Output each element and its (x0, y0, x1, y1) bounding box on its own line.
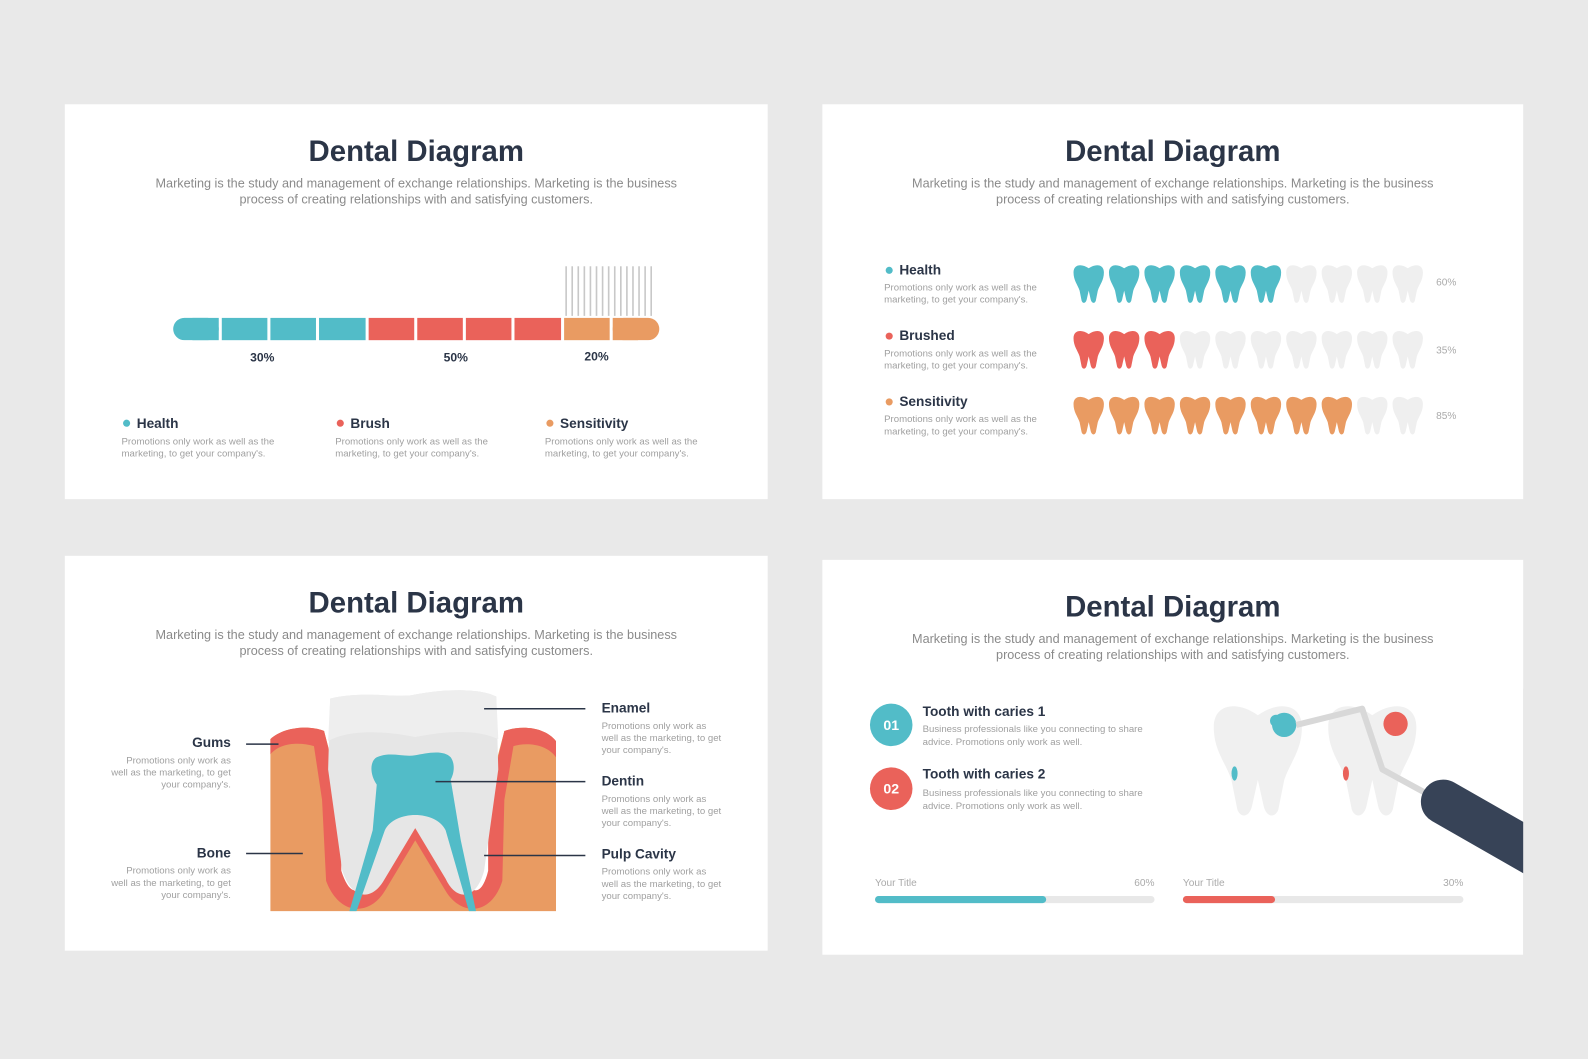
row: sensitivity (884, 394, 1456, 437)
row: sensitivity: Sensitivity (899, 394, 968, 409)
legend: brush: Promotions only work as well as the (335, 436, 488, 447)
label: gums (110, 735, 231, 791)
row: brushed: Promotions only work as well as the (884, 348, 1037, 359)
item 01 (870, 704, 1143, 748)
subtitle: process of creating relationships with and satisfying customers. (996, 192, 1350, 206)
legend: health (122, 416, 274, 460)
item 01: advice. Promotions only work as well. (923, 737, 1082, 748)
label: bone: Bone (197, 846, 231, 861)
subtitle: Marketing is the study and management of exchange relationships. Marketing is the business (912, 632, 1433, 646)
row: health (884, 262, 1456, 306)
row: brushed: marketing, to get your company's. (884, 361, 1028, 372)
subtitle (912, 632, 1434, 662)
label: gums: well as the marketing, to get (110, 768, 231, 779)
progress bar 2 (1183, 878, 1463, 903)
panel: tooth rating panel (822, 104, 1523, 499)
progress bar 2: Your Title (1183, 878, 1225, 889)
row: brushed (884, 328, 1456, 372)
row: health: marketing, to get your company's. (884, 295, 1028, 306)
icon: dental probe (1296, 709, 1550, 863)
bar labels: 30% (250, 350, 275, 364)
row: sensitivity: Promotions only work as well as the (884, 414, 1037, 425)
legend: brush: marketing, to get your company's. (335, 449, 479, 460)
row: health: Promotions only work as well as the (884, 283, 1037, 294)
label: enamel (601, 701, 722, 756)
subtitle (156, 176, 677, 206)
subtitle (912, 176, 1434, 206)
legend: brush: Brush (350, 416, 390, 431)
item 02 (870, 767, 1143, 812)
item 02: advice. Promotions only work as well. (923, 801, 1082, 812)
label: enamel: your company's. (602, 745, 671, 756)
progress bar 1 (875, 878, 1155, 903)
item 01: Tooth with caries 1 (923, 704, 1046, 719)
illustration: teeth with caries (1214, 706, 1416, 816)
row: brushed: 35% (1436, 345, 1456, 356)
panel: caries (822, 560, 1584, 962)
legend: health: Promotions only work as well as the (122, 436, 274, 447)
subtitle: Marketing is the study and management of exchange relationships. Marketing is the business (912, 176, 1433, 190)
label: bone: well as the marketing, to get (110, 878, 231, 889)
legend: sensitivity: Sensitivity (560, 416, 629, 431)
label: bone: your company's. (161, 890, 231, 901)
legend: sensitivity (545, 416, 698, 460)
item 02: 02 (883, 782, 899, 798)
label lines (246, 709, 585, 856)
legend: sensitivity: marketing, to get your company's. (545, 449, 689, 460)
title: Dental Diagram (309, 135, 524, 168)
subtitle: process of creating relationships with and satisfying customers. (240, 644, 593, 658)
subtitle: Marketing is the study and management of exchange relationships. Marketing is the business (156, 176, 677, 190)
progress bar 1: Your Title (875, 878, 917, 889)
row: sensitivity: marketing, to get your company's. (884, 426, 1028, 437)
label: gums: Gums (192, 735, 231, 750)
item 01: Business professionals like you connecting to share (923, 724, 1143, 735)
bar labels: 50% (444, 350, 468, 364)
row: health: 60% (1436, 278, 1456, 289)
label: pulp cavity: your company's. (602, 891, 671, 902)
label: gums: your company's. (161, 780, 231, 791)
title: Dental Diagram (1065, 591, 1280, 624)
label: pulp cavity: Pulp Cavity (602, 847, 676, 862)
item 02: Business professionals like you connecting to share (923, 788, 1143, 799)
label: dentin (601, 774, 722, 829)
segmented bar (173, 318, 659, 340)
progress bar 1: 60% (1134, 878, 1155, 889)
row: brushed: Brushed (899, 328, 955, 343)
legend: brush (335, 416, 488, 460)
title: Dental Diagram (1065, 135, 1280, 168)
subtitle: Marketing is the study and management of exchange relationships. Marketing is the business (156, 628, 677, 642)
item 01: 01 (883, 718, 899, 734)
label: dentin: Dentin (602, 774, 644, 789)
label: gums: Promotions only work as (126, 755, 231, 766)
label: bone: Promotions only work as (126, 866, 231, 877)
label: pulp cavity: Promotions only work as (602, 867, 706, 878)
label: enamel: Enamel (602, 701, 650, 716)
label: dentin: well as the marketing, to get (601, 806, 722, 817)
legend: sensitivity: Promotions only work as well as the (545, 436, 698, 447)
label: enamel: Promotions only work as (602, 721, 706, 732)
legend: health: marketing, to get your company's. (122, 449, 265, 460)
subtitle: process of creating relationships with and satisfying customers. (996, 648, 1350, 662)
bar labels (250, 349, 609, 364)
row: health: Health (899, 262, 941, 277)
label: pulp cavity (601, 847, 722, 902)
row: sensitivity: 85% (1436, 411, 1456, 422)
label: dentin: Promotions only work as (602, 794, 706, 805)
label: dentin: your company's. (602, 818, 671, 829)
label: pulp cavity: well as the marketing, to get (601, 879, 722, 890)
label: bone (110, 846, 231, 901)
legend: health: Health (137, 416, 178, 431)
subtitle (156, 628, 677, 658)
bar labels: 20% (584, 349, 609, 363)
label: enamel: well as the marketing, to get (601, 733, 722, 744)
icon: toothbrush bristles (566, 266, 651, 316)
tooth cross-section (270, 690, 556, 911)
progress bar 2: 30% (1443, 878, 1463, 889)
panel: bar chart panel (65, 104, 768, 499)
subtitle: process of creating relationships with and satisfying customers. (240, 192, 593, 206)
panel: tooth anatomy (65, 556, 768, 951)
title: Dental Diagram (309, 587, 524, 620)
item 02: Tooth with caries 2 (923, 767, 1046, 782)
